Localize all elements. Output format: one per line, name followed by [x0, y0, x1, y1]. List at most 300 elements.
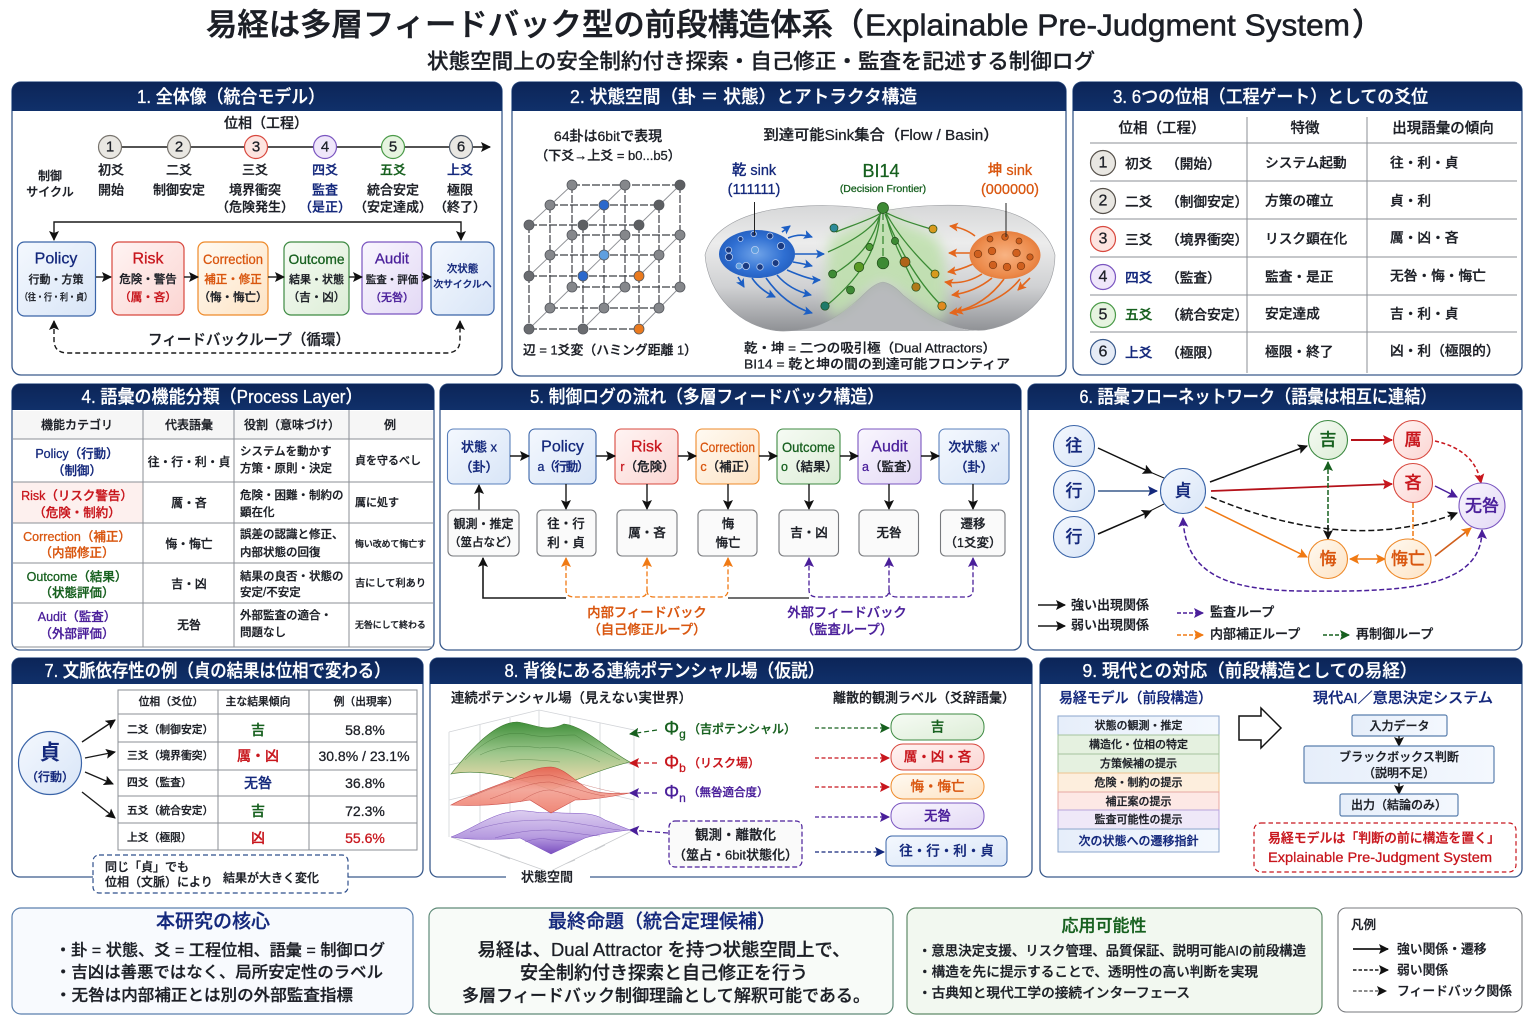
row: Policy: 方策・原則・決定 — [240, 461, 332, 475]
right sub-heading: 離散的観測ラベル（爻辞語彙） — [833, 690, 1015, 706]
modern pipeline: 出力（結論のみ） — [1351, 798, 1447, 812]
external feedback label: 外部フィードバック — [787, 604, 907, 620]
network nodes: 厲 — [1404, 430, 1422, 450]
table header: 主な結果傾向 — [226, 694, 290, 708]
row 3 — [1090, 226, 1459, 252]
phase timeline: 1 — [106, 138, 114, 156]
left sub-heading: 連続ポテンシャル場（見えない実世界） — [451, 690, 692, 706]
node: Risk: r（危険） — [620, 460, 675, 474]
row 2: 方策の確立 — [1265, 192, 1334, 208]
red callout: Explainable Pre-Judgment System — [1268, 849, 1492, 865]
table rules — [1090, 117, 1517, 373]
network nodes: 行 — [1066, 482, 1082, 500]
flow arrows — [479, 456, 973, 510]
row 4: 四爻 — [1125, 270, 1153, 286]
node: Audit — [858, 429, 921, 484]
orange dots — [974, 234, 1033, 271]
red callout: 易経モデルは「判断の前に構造を置く」 — [1268, 830, 1500, 846]
table rows: 上爻（極限） — [127, 830, 192, 844]
phase names: 四爻 — [312, 162, 338, 178]
row: Correction: 内部状態の回復 — [240, 545, 321, 559]
flow streamlines: green — [826, 212, 942, 306]
row: Outcome: （状態評価） — [39, 585, 115, 600]
modern pipeline: （説明不足） — [1363, 765, 1435, 780]
row 2: 2 — [1099, 192, 1108, 210]
phase timeline: 3 — [252, 138, 260, 156]
qian sink label: 乾 sink — [732, 162, 777, 179]
label pills: 往・行・利・貞 — [899, 842, 994, 858]
panel 3: six phases table — [1073, 82, 1522, 375]
lower box labels: 往・行 — [547, 517, 585, 531]
lower box labels: 厲・吝 — [628, 525, 666, 540]
node: Outcome — [777, 429, 840, 484]
box: Audit — [362, 242, 422, 314]
Yijing model stack: 状態の観測・推定 — [1094, 718, 1182, 732]
phase names: （終了） — [434, 200, 486, 214]
kun sink label: 坤 sink — [988, 162, 1033, 179]
proposition body: 多層フィードバック制御理論として解釈可能である。 — [462, 986, 870, 1006]
row 5: 吉・利・貞 — [1390, 306, 1458, 322]
Yijing model stack: 構造化・位相の特定 — [1089, 737, 1188, 751]
top bracket arrow — [54, 222, 461, 240]
axis label: state space: 状態空間 — [521, 870, 573, 884]
row: Outcome: 吉・凶 — [171, 577, 207, 591]
3D surface plot — [449, 710, 634, 872]
table header — [139, 694, 398, 708]
dashed callout — [93, 855, 348, 893]
table header: 位相（工程） — [1118, 120, 1206, 137]
Yijing model stack: 方策候補の提示 — [1100, 756, 1177, 770]
proposition heading: 最終命題（統合定理候補） — [548, 910, 776, 932]
row 4: 无咎・悔・悔亡 — [1390, 268, 1486, 284]
node: Correction: c（補正） — [700, 459, 757, 474]
blue dots — [725, 231, 785, 270]
Yijing model stack — [1058, 716, 1219, 852]
label pills: 吉 — [931, 720, 944, 734]
node: Risk: Risk — [631, 438, 663, 456]
hypercube graph — [524, 180, 685, 334]
row 2 — [1090, 188, 1431, 214]
internal feedback label: （自己修正ループ） — [588, 622, 706, 636]
control cycle label: 制御 — [38, 168, 62, 183]
phase names: （危険発生） — [216, 200, 294, 214]
row 4 — [1090, 264, 1486, 290]
network nodes: 悔亡 — [1391, 550, 1425, 568]
flow arrows between boxes — [96, 276, 431, 278]
observation discretisation box: 観測・離散化 — [695, 826, 776, 842]
outcome table — [118, 690, 417, 850]
node: Correction — [696, 429, 759, 484]
box: Outcome — [284, 242, 349, 315]
row 1: 1 — [1099, 154, 1108, 172]
phi g: （吉ポテンシャル） — [688, 722, 796, 736]
phi b: （リスク場） — [688, 756, 760, 770]
row: Policy: 貞を守るべし — [355, 453, 421, 467]
phase names: （安定達成） — [354, 200, 432, 214]
row 2: 貞・利 — [1390, 192, 1431, 208]
core bullets: ・吉凶は善悪ではなく、局所安定性のラベル — [55, 964, 383, 982]
zhen circle: 貞 — [40, 742, 60, 764]
phase names — [98, 162, 486, 214]
row 6: 極限・終了 — [1265, 344, 1333, 360]
attractor note — [744, 340, 1010, 372]
row: Risk: 顕在化 — [240, 505, 275, 519]
table rows: 72.3% — [345, 803, 385, 819]
table rows: 58.8% — [345, 722, 385, 738]
table header: 特徴 — [1290, 120, 1320, 137]
label pills — [886, 714, 1007, 866]
box: Risk: 危険・警告 — [119, 272, 177, 286]
row 3: （境界衝突） — [1166, 232, 1248, 248]
network nodes: 貞 — [1174, 482, 1192, 500]
zhen circle — [18, 732, 82, 794]
applicability bullets: ・古典知と現代工学の接続インターフェース — [918, 984, 1190, 1000]
table header: 役割（意味づけ） — [244, 417, 340, 432]
label pills: 悔・悔亡 — [910, 779, 964, 794]
box: Risk: （厲・吝） — [119, 290, 177, 304]
lower box labels: 悔亡 — [715, 536, 741, 550]
row 1: （開始） — [1166, 156, 1221, 172]
applicability heading: 応用可能性 — [1062, 916, 1146, 936]
table header — [1118, 119, 1494, 137]
table header: 出現語彙の傾向 — [1392, 119, 1494, 137]
phase names: 初爻 — [98, 162, 124, 178]
row: Audit: 外部監査の適合・ — [240, 608, 332, 622]
node: next state — [939, 429, 1009, 484]
box: Risk: Risk — [132, 250, 165, 268]
box: Outcome: Outcome — [288, 251, 345, 267]
row: Outcome: 安定/不安定 — [240, 585, 301, 599]
panel 4: vocabulary functional classes — [12, 384, 434, 650]
phi g: g — [679, 727, 686, 741]
row 4: 監査・是正 — [1265, 270, 1334, 284]
label pills: 厲・凶・吝 — [904, 750, 972, 764]
double-well basin diagram — [705, 202, 1055, 331]
network nodes: 往 — [1066, 436, 1082, 456]
row 1: 初爻 — [1125, 156, 1153, 172]
basin caption: 到達可能Sink集合（Flow / Basin） — [764, 127, 998, 144]
lower box labels: 无咎 — [876, 525, 902, 540]
row 2: 二爻 — [1125, 194, 1153, 210]
node: Outcome: o（結果） — [781, 460, 838, 474]
row: Outcome: 結果の良否・状態の — [240, 569, 344, 583]
panel 8: continuous potential field — [430, 658, 1032, 884]
main title — [206, 8, 1383, 42]
table header: 例（出現率） — [334, 695, 398, 708]
heading 5: 5. 制御ログの流れ（多層フィードバック構造） — [530, 387, 884, 407]
table rows — [127, 722, 410, 846]
row 3: 厲・凶・吝 — [1390, 230, 1459, 246]
phi n: n — [679, 791, 686, 805]
phase names: 監査 — [312, 182, 338, 198]
observation discretisation box — [630, 821, 802, 867]
table rows: 二爻（制御安定） — [127, 722, 213, 736]
table rows: 55.6% — [345, 830, 385, 846]
cube footnote: 辺 = 1爻変（ハミング距離 1） — [523, 342, 697, 358]
row 3: 三爻 — [1125, 232, 1153, 248]
legend: weak: 弱い関係 — [1397, 962, 1448, 978]
box: Audit: 監査・評価 — [366, 273, 418, 286]
phase names: 五爻 — [380, 162, 406, 178]
external feedback loop — [809, 558, 973, 597]
hollow block arrow — [1239, 708, 1281, 748]
feedback loop dashed arrow — [54, 321, 460, 353]
heading 4: 4. 語彙の機能分類（Process Layer） — [82, 387, 362, 407]
network nodes: 吉 — [1320, 430, 1336, 450]
box: Correction — [198, 242, 268, 315]
box: Correction: Correction — [203, 251, 263, 267]
row: Risk: 危険・困難・制約の — [240, 488, 344, 502]
modern pipeline — [1304, 715, 1494, 816]
phase names: 三爻 — [242, 162, 268, 178]
box: Correction: （悔・悔亡） — [198, 290, 268, 304]
network edges — [1098, 440, 1482, 591]
row: Audit: 无咎にして終わる — [355, 619, 426, 630]
panel 6: vocabulary flow network — [1028, 384, 1522, 650]
lower box labels — [449, 516, 1001, 550]
row: Policy: 往・行・利・貞 — [148, 455, 230, 469]
row 1 — [1090, 150, 1458, 176]
table rows: 四爻（監査） — [127, 775, 192, 789]
row 5: 安定達成 — [1265, 306, 1320, 322]
lower box labels: 吉・凶 — [790, 526, 828, 540]
main title: Explainable Pre-Judgment System — [865, 8, 1350, 42]
external feedback label: （監査ループ） — [801, 622, 893, 636]
phi b — [630, 752, 760, 775]
row: Correction: （内部修正） — [39, 545, 115, 560]
lower box labels: （1爻変） — [945, 535, 1001, 550]
panel 9: correspondence with modern systems — [1040, 658, 1522, 877]
phi g — [630, 718, 796, 741]
table rows: 凶 — [251, 830, 265, 846]
node: Outcome: Outcome — [782, 439, 835, 455]
row 6: 凶・利（極限的） — [1390, 344, 1500, 358]
table rows: 吉 — [251, 803, 265, 819]
table rows: 无咎 — [244, 775, 272, 791]
network nodes: 行 — [1066, 528, 1082, 546]
Yijing model stack: 危険・制約の提示 — [1094, 775, 1182, 789]
phase timeline: 2 — [175, 138, 183, 156]
table rows: 吉 — [251, 722, 265, 738]
box: Audit: Audit — [375, 250, 410, 268]
row 4: 4 — [1099, 268, 1108, 286]
applicability bullets — [918, 942, 1306, 1000]
node: state x: （卦） — [459, 460, 499, 474]
heading 6: 6. 語彙フローネットワーク（語彙は相互に連結） — [1080, 387, 1436, 407]
row: Audit: Audit（監査） — [38, 609, 116, 624]
phase timeline: 4 — [321, 138, 329, 156]
row: Policy: Policy（行動） — [35, 446, 119, 461]
Yijing model stack: 監査可能性の提示 — [1094, 812, 1182, 826]
table rows: 36.8% — [345, 775, 385, 791]
row: Correction: 悔い改めて悔亡す — [355, 538, 426, 549]
lower box labels: 利・貞 — [547, 535, 585, 550]
row: Policy: （制御） — [52, 463, 102, 478]
branch arrows — [82, 720, 115, 818]
lower box labels: 観測・推定 — [453, 516, 514, 531]
frontier nodes — [821, 202, 946, 310]
row 6 — [1090, 340, 1500, 364]
table rows: 五爻（統合安定） — [127, 803, 213, 817]
panel: research core — [12, 908, 413, 1014]
phi b: b — [679, 761, 686, 775]
node: Correction: Correction — [700, 439, 755, 455]
core bullets — [55, 940, 385, 1004]
row 3: リスク顕在化 — [1265, 230, 1347, 246]
row 6: 上爻 — [1125, 346, 1153, 360]
legend title: 凡例 — [1351, 918, 1376, 932]
modern pipeline: 入力データ — [1369, 718, 1430, 733]
row 5: 5 — [1099, 306, 1108, 324]
row: Policy: システムを動かす — [240, 444, 332, 458]
row: Risk: 厲・吝 — [171, 496, 207, 510]
lower box labels: （筮占など） — [449, 535, 518, 549]
legend: strong: 強い関係・遷移 — [1397, 942, 1487, 956]
network nodes: 无咎 — [1465, 496, 1499, 516]
network nodes: 悔 — [1320, 550, 1336, 568]
row: Audit: 問題なし — [240, 626, 286, 639]
proposition body: 易経は、Dual Attractor を持つ状態空間上で、 — [478, 940, 850, 960]
feedback loop label: フィードバックループ（循環） — [148, 332, 350, 348]
proposition body — [462, 940, 870, 1006]
row: Outcome: 吉にして利あり — [355, 576, 426, 590]
legend: weak — [1353, 962, 1448, 978]
row 6: （極限） — [1166, 346, 1221, 360]
applicability bullets: ・意思決定支援、リスク管理、品質保証、説明可能AIの前段構造 — [918, 942, 1306, 958]
heading 1: 1. 全体像（統合モデル） — [137, 86, 325, 107]
cube caption: （下爻→上爻 = b0...b5） — [535, 148, 681, 162]
row: Audit: （外部評価） — [39, 626, 115, 641]
dashed callout: 位相（文脈）により — [105, 874, 213, 889]
box: next state — [431, 242, 494, 315]
table shading and rules — [13, 410, 433, 647]
network legend: 再制御ループ — [1356, 626, 1433, 642]
row: Outcome — [27, 569, 426, 600]
proposition body: 安全制約付き探索と自己修正を行う — [520, 963, 808, 983]
box: Risk — [112, 242, 184, 315]
orange attractor flows — [945, 226, 1030, 313]
modern pipeline: ブラックボックス判断 — [1339, 749, 1459, 764]
row 1: 往・利・貞 — [1390, 154, 1458, 170]
row: Risk: 厲に処す — [355, 495, 399, 509]
phi b: Φ — [664, 752, 679, 774]
table header: 機能カテゴリ — [41, 417, 113, 432]
network legend: 強い出現関係 — [1071, 598, 1149, 612]
node: state x: 状態 x — [461, 440, 498, 454]
phi n: （無咎適合度） — [688, 785, 768, 799]
dashed callout: 同じ「貞」でも — [105, 859, 189, 874]
node: Policy — [529, 429, 596, 484]
phase timeline — [98, 136, 490, 158]
main title: 易経は多層フィードバック型の前段構造体系 — [206, 8, 833, 42]
lower boxes — [448, 510, 1005, 556]
node: Policy: a（行動） — [538, 459, 590, 474]
box: Policy: Policy — [35, 250, 77, 268]
row 6: 6 — [1099, 344, 1108, 360]
box: Correction: 補正・修正 — [204, 272, 262, 286]
row: Risk: （危険・制約） — [33, 505, 121, 520]
lower box labels: 遷移 — [960, 516, 986, 531]
phase names: 極限 — [447, 182, 473, 198]
node: Risk — [615, 429, 678, 484]
heading 8: 8. 背後にある連続ポテンシャル場（仮説） — [504, 661, 824, 681]
observation discretisation box: （筮占・6bit状態化） — [673, 848, 798, 862]
row: Correction: 誤差の認識と修正、 — [240, 527, 344, 541]
network legend: 弱い出現関係 — [1071, 618, 1149, 632]
Yijing model stack: 次の状態への遷移指針 — [1078, 833, 1199, 848]
node: state x — [448, 429, 510, 484]
panel: applicability — [907, 908, 1322, 1014]
legend: feedback: フィードバック関係 — [1397, 984, 1512, 998]
box: Policy: （往・行・利・貞） — [20, 292, 92, 304]
network nodes: 吝 — [1404, 474, 1422, 492]
row: Audit — [38, 608, 426, 641]
zhen circle: （行動） — [26, 769, 74, 784]
applicability bullets: ・構造を先に提示することで、透明性の高い判断を実現 — [918, 964, 1258, 980]
dashed callout: 結果が大きく変化 — [223, 870, 319, 885]
box: Policy: 行動・方策 — [28, 272, 84, 286]
attractor note: BI14 = 乾と坤の間の到達可能フロンティア — [744, 356, 1010, 372]
table rows: 厲・凶 — [237, 748, 279, 764]
table header — [41, 417, 396, 432]
left sub-heading: 易経モデル（前段構造） — [1059, 689, 1212, 707]
phase names: 制御安定 — [153, 182, 205, 198]
panel: legend — [1338, 908, 1522, 1012]
network legend: 内部補正ループ — [1210, 626, 1300, 642]
panel 5: control log flow — [440, 384, 1021, 650]
attractor note: 乾・坤 = 二つの吸引極（Dual Attractors） — [744, 340, 996, 356]
table header: 例 — [384, 418, 396, 432]
phase names: 開始 — [98, 182, 124, 198]
legend: strong — [1353, 942, 1487, 956]
table header: 代表語彙 — [165, 417, 213, 432]
box: Outcome: 結果・状態 — [289, 272, 344, 286]
node: Audit: Audit — [871, 438, 908, 456]
qian sink label: (111111) — [728, 182, 780, 198]
network nodes — [1054, 420, 1505, 579]
phase timeline: 5 — [389, 138, 397, 156]
box: Policy — [18, 242, 96, 316]
node: next state: 次状態 x' — [948, 440, 1000, 454]
heading 9: 9. 現代との対応（前段構造としての易経） — [1082, 661, 1418, 681]
phase timeline: 6 — [457, 138, 465, 156]
phase label: 位相（工程） — [224, 115, 308, 131]
phi n: Φ — [664, 782, 679, 804]
row: Risk — [21, 488, 399, 520]
box: next state: 次サイクルへ — [433, 278, 492, 290]
right sub-heading: 現代AI／意思決定システム — [1313, 690, 1493, 707]
phase names: 二爻 — [166, 162, 192, 178]
panel 2: state space and attractor — [512, 82, 1066, 376]
node: Audit: a（監査） — [862, 459, 919, 474]
red callout — [1254, 823, 1516, 872]
row 5: （統合安定） — [1166, 308, 1248, 322]
phase names: 上爻 — [447, 162, 473, 178]
row 4: （監査） — [1166, 270, 1221, 286]
box: next state: 次状態 — [447, 262, 479, 275]
core bullets: ・卦 = 状態、爻 = 工程位相、語彙 = 制御ログ — [55, 940, 385, 960]
network legend — [1038, 598, 1433, 642]
phase names: （是正） — [299, 200, 351, 214]
panel 1: overall integrated model — [12, 82, 502, 375]
BI14 label: (Decision Frontier) — [840, 183, 926, 195]
core heading: 本研究の核心 — [156, 910, 270, 932]
control cycle label: サイクル — [26, 185, 74, 199]
row 2: （制御安定） — [1166, 194, 1248, 210]
box: Outcome: （吉・凶） — [288, 291, 345, 304]
row 1: システム起動 — [1265, 156, 1347, 170]
row 3: 3 — [1099, 230, 1108, 248]
